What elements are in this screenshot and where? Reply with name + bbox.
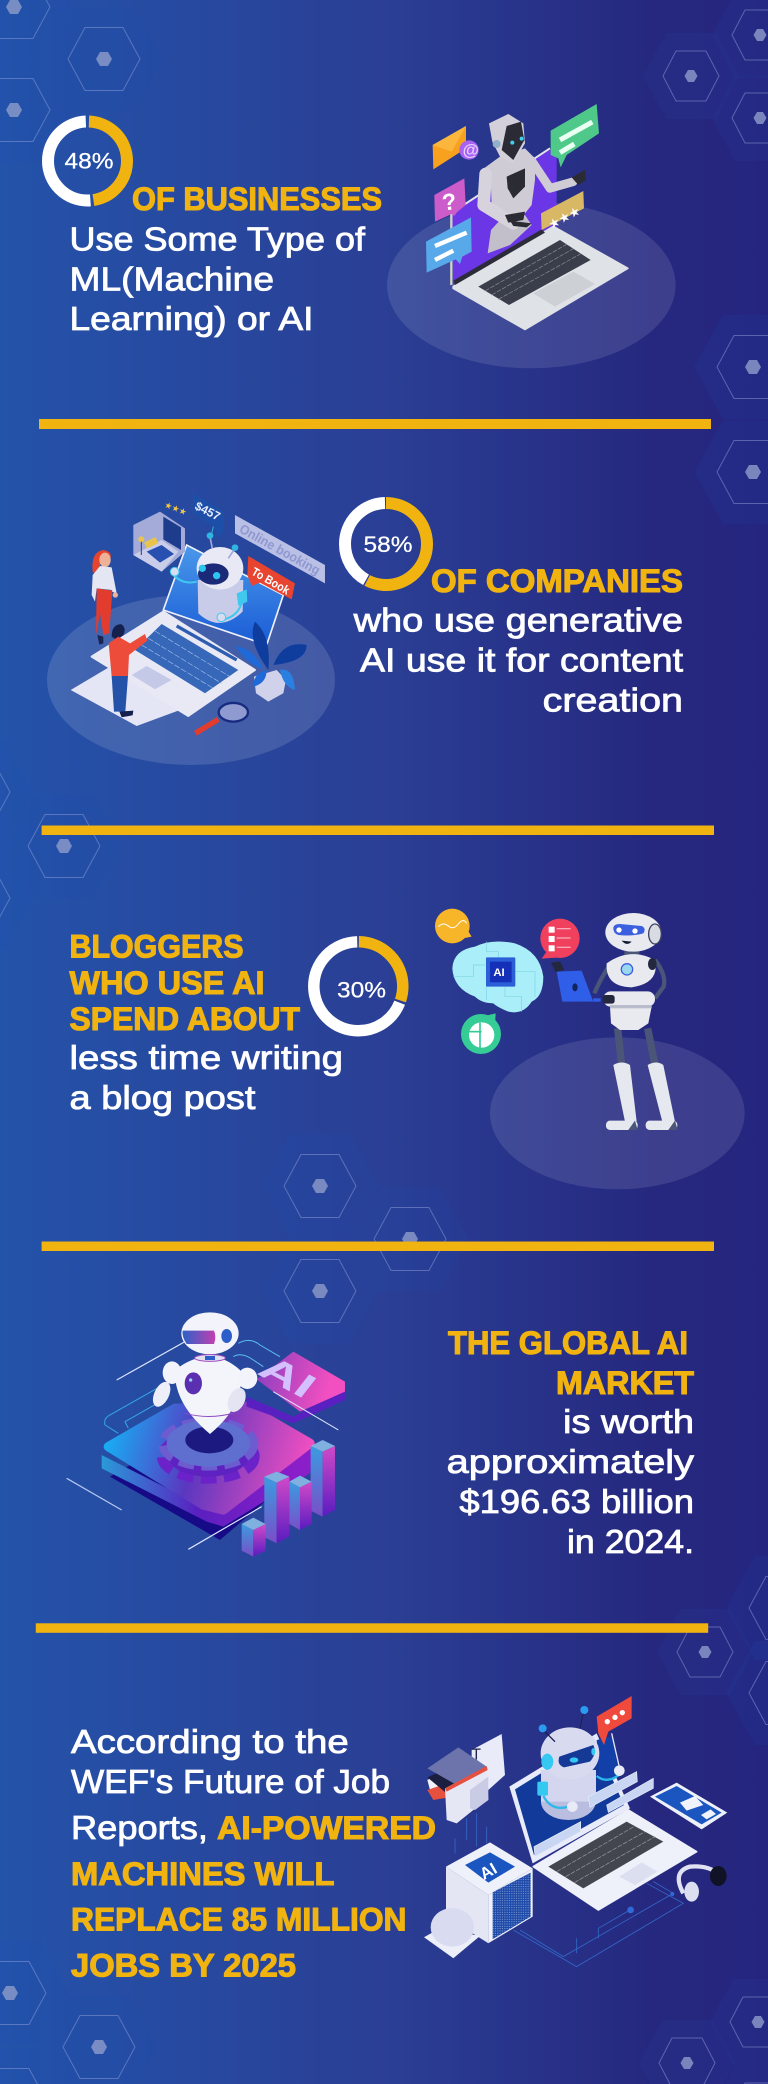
- divider 2: [42, 826, 714, 835]
- illustration: robot in laptop: [387, 104, 676, 368]
- text block: [447, 1403, 695, 1560]
- heading: [71, 1810, 436, 1984]
- illustration: AI workstation: AI: [476, 1859, 500, 1884]
- magnifier: [219, 703, 248, 722]
- donut: 30%: [314, 942, 403, 1031]
- man: [112, 624, 125, 640]
- platform: [110, 1415, 313, 1540]
- text block: who use generative: [352, 602, 683, 638]
- text block: WEF's Future of Job: [71, 1763, 390, 1800]
- text block: AI use it for content: [360, 642, 683, 678]
- panel: market: [67, 1312, 695, 1560]
- heading: AI-POWERED: [217, 1810, 436, 1846]
- text block: [70, 1039, 343, 1116]
- text block: is worth: [563, 1403, 694, 1440]
- illustration: booking robot: ★★★: [163, 499, 189, 518]
- text block: [71, 1723, 390, 1846]
- robot body: [488, 215, 532, 253]
- wires and lines: [105, 1387, 160, 1433]
- text block: creation: [543, 682, 683, 718]
- illustration: robot in laptop: ?: [440, 188, 458, 216]
- text block: Learning) or AI: [70, 300, 314, 337]
- heading: SPEND ABOUT: [70, 1001, 300, 1037]
- headphones: [679, 1866, 718, 1893]
- heading: [70, 928, 300, 1037]
- heading: OF COMPANIES: [431, 563, 683, 599]
- illustration: AI workstation: [424, 1696, 727, 1967]
- illustration: robot in laptop: ★★★: [546, 204, 583, 232]
- text block: in 2024.: [567, 1523, 694, 1560]
- donut: 30%: 30%: [337, 978, 386, 1002]
- hotel room: [133, 512, 185, 572]
- text block: [70, 220, 366, 337]
- bot: [198, 580, 243, 623]
- text block: According to the: [71, 1723, 349, 1760]
- woman: [92, 550, 111, 577]
- heading: BLOGGERS: [70, 928, 244, 964]
- bars: [264, 1477, 277, 1543]
- heading: JOBS BY 2025: [71, 1948, 296, 1984]
- donut: 58%: 58%: [364, 532, 412, 557]
- donut: 58%: [345, 503, 427, 585]
- illustration: standing robot: AI: [493, 967, 505, 979]
- illustration: booking robot: $457: [193, 499, 223, 524]
- plant: [254, 670, 286, 702]
- donut: 48%: [48, 122, 127, 200]
- heading: MACHINES WILL: [71, 1856, 334, 1892]
- price tag: [193, 493, 224, 539]
- circuit lines: [455, 1813, 683, 1967]
- AI tile: [247, 1388, 345, 1423]
- text block: $196.63 billion: [459, 1483, 694, 1520]
- chat bubbles and brain: [435, 909, 470, 943]
- panel: businesses: [48, 104, 676, 368]
- heading: MARKET: [556, 1365, 694, 1401]
- heading: WHO USE AI: [70, 965, 264, 1001]
- gear: [163, 1436, 253, 1477]
- red bubble: [597, 1696, 632, 1745]
- online booking strip: [235, 515, 325, 583]
- message bars: [588, 1772, 637, 1807]
- laptop: [533, 1810, 697, 1910]
- illustration: AI workstation: T: [472, 1746, 482, 1763]
- donut: 48%: 48%: [64, 148, 114, 174]
- divider 4: [36, 1623, 708, 1633]
- text block: Reports,: [71, 1809, 208, 1846]
- panel: bloggers: [70, 909, 745, 1189]
- text block: Use Some Type of: [70, 220, 366, 258]
- panel: jobs: [71, 1696, 727, 1984]
- illustration: robot on platform: AI: [251, 1349, 324, 1406]
- phone: [650, 1783, 727, 1829]
- bubbles: [433, 126, 466, 169]
- brain on tray: [424, 1928, 480, 1958]
- illustration: booking robot: Online booking: [237, 521, 323, 578]
- robot: [618, 1028, 622, 1065]
- text block: [352, 602, 683, 718]
- text block: less time writing: [70, 1039, 343, 1076]
- text block: a blog post: [70, 1079, 256, 1116]
- illustration: standing robot: [435, 909, 745, 1189]
- AI block: [446, 1867, 488, 1943]
- robot: [181, 1312, 239, 1354]
- heading: THE GLOBAL AI: [448, 1325, 688, 1361]
- heading: OF BUSINESSES: [132, 181, 382, 217]
- text block: ML(Machine: [70, 260, 274, 298]
- divider 1: [39, 419, 711, 429]
- illustration: robot in laptop: @: [463, 141, 479, 160]
- robot: [597, 1737, 620, 1782]
- books and paper: [472, 1734, 505, 1790]
- heading: [448, 1325, 694, 1401]
- to book bubble: [247, 556, 295, 599]
- heading: REPLACE 85 MILLION: [71, 1902, 406, 1938]
- panel: companies: [47, 493, 683, 765]
- divider 3: [42, 1242, 714, 1251]
- illustration: robot on platform: [67, 1312, 345, 1557]
- illustration: booking robot: [47, 493, 335, 765]
- text block: approximately: [447, 1443, 695, 1480]
- illustration: booking robot: To Book: [249, 564, 292, 598]
